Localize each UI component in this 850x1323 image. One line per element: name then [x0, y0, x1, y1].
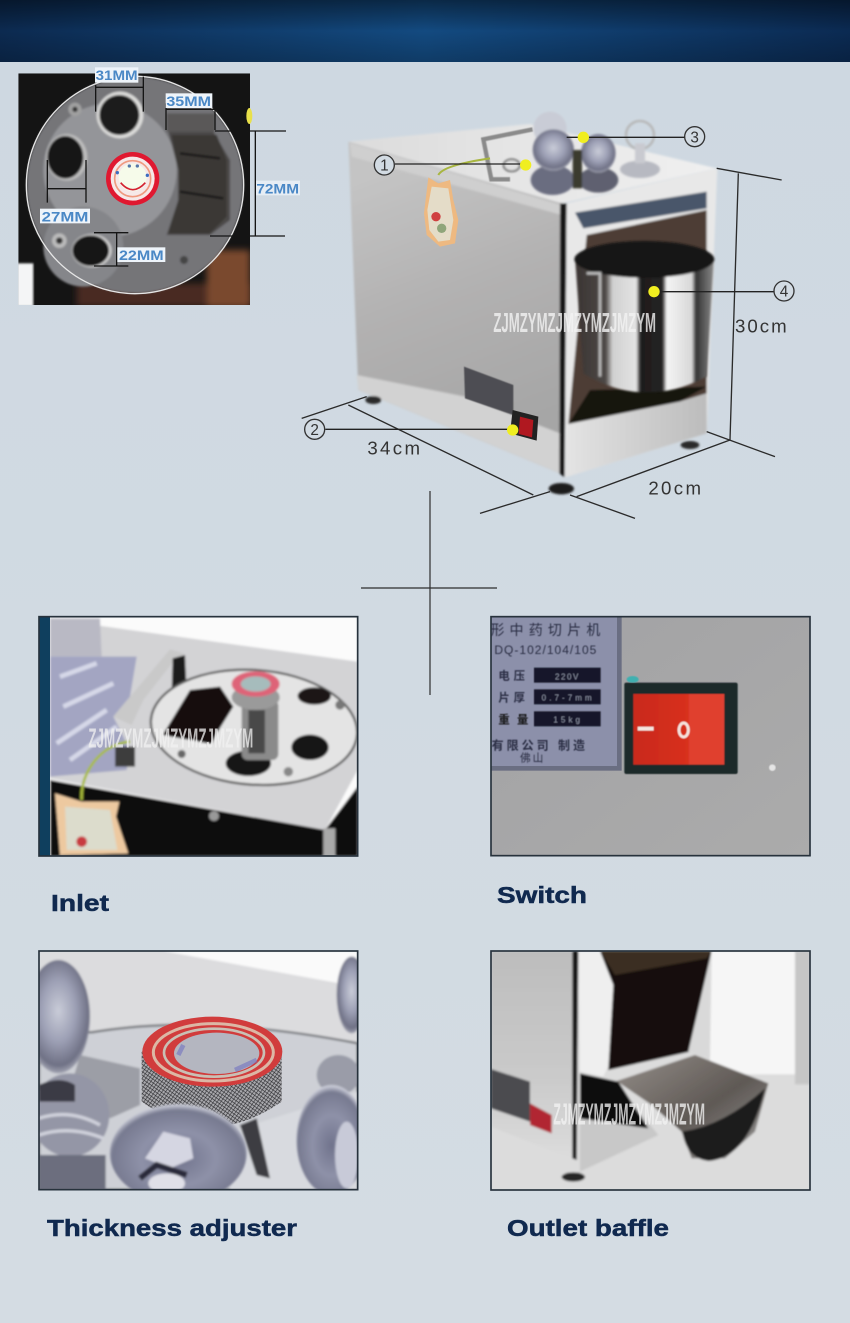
glass knob, front [109, 1084, 357, 1189]
yellow marker at plate edge [246, 108, 252, 124]
photo: inlet [39, 617, 361, 858]
header banner [0, 0, 850, 62]
specification plate: 有限公司 制造 [492, 737, 585, 752]
callout 3: 3 [690, 129, 699, 146]
dimension: 20cm: 20cm [648, 478, 701, 499]
photo: outlet baffle [491, 951, 810, 1190]
callout 4: 4 [780, 284, 789, 301]
machine body [302, 112, 794, 518]
callout 1 [374, 155, 531, 175]
machine body: ZJMZYMZJMZYMZJMZYM [493, 307, 656, 338]
photo: switch [490, 617, 810, 856]
ring around plate [26, 76, 244, 294]
rocker switch [624, 683, 738, 774]
label: 72MM: 72MM [256, 180, 299, 196]
label: Thickness adjuster: Thickness adjuster [47, 1215, 297, 1241]
specification plate [490, 617, 622, 771]
callout 3 [567, 127, 705, 147]
specification plate: 0.7-7mm [542, 694, 592, 703]
specification plate: DQ-102/104/105 [494, 643, 597, 657]
specification plate: 片 厚 [498, 691, 525, 705]
callout 1: 1 [380, 158, 389, 175]
photo: inlet: ZJMZYMZJMZYMZJMZYM [88, 722, 253, 753]
specification plate: 220V [555, 672, 579, 681]
specification plate: 重 量 [498, 712, 528, 726]
label: 31MM: 31MM [96, 67, 138, 83]
dimension lines [47, 77, 286, 266]
hang tag [424, 158, 490, 247]
label: Inlet: Inlet [51, 890, 109, 916]
handle [483, 129, 533, 179]
dimension: 30cm: 30cm [735, 316, 787, 337]
label: 35MM: 35MM [166, 93, 211, 109]
glass knobs [504, 112, 660, 195]
label: Switch: Switch [497, 882, 587, 908]
callout 4 [648, 281, 794, 301]
dimension lines [302, 168, 782, 518]
specification plate: 15kg [553, 715, 580, 724]
power switch [510, 410, 538, 441]
knurled knob [142, 1017, 282, 1127]
label: Outlet baffle: Outlet baffle [507, 1215, 669, 1241]
label: 27MM: 27MM [42, 208, 88, 224]
machine with callouts and dimensions [302, 112, 794, 518]
photo: inlet plate with hole dimensions [17, 67, 300, 307]
collection bucket [574, 241, 714, 393]
callout 2: 2 [310, 422, 319, 439]
dimension: 34cm: 34cm [367, 438, 420, 459]
specification plate: 佛山 [520, 752, 543, 765]
nameplate [464, 367, 513, 415]
specification plate: 形中药切片机 [490, 622, 600, 638]
callout 2 [305, 419, 518, 439]
label: 22MM: 22MM [119, 247, 164, 263]
icon: smiley sticker [106, 152, 159, 205]
specification plate: 电 压 [498, 668, 525, 682]
cross lines [361, 491, 497, 695]
photo: thickness adjuster [27, 951, 367, 1203]
